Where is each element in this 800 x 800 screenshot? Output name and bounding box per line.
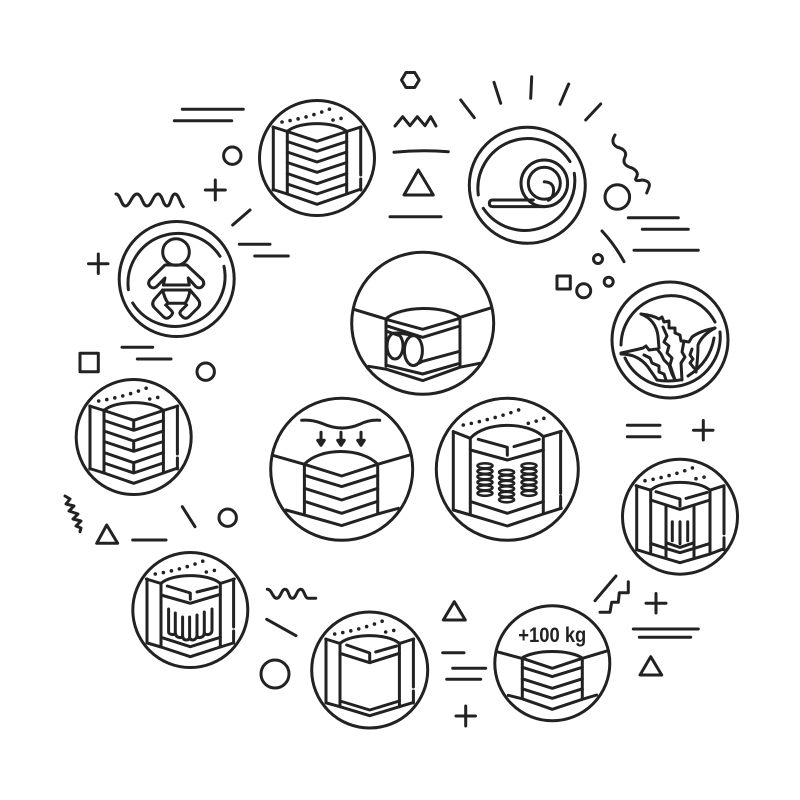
decorations: upper-right shapes [557, 135, 698, 298]
springs [478, 463, 536, 502]
icon: layered mattress, top [260, 100, 374, 216]
label: +100 kg: +100 kg [518, 624, 586, 647]
icon: 100 kg load mattress [495, 606, 610, 721]
decorations: sun rays above roll [461, 77, 601, 120]
decorations: lower-right shapes [595, 420, 713, 675]
decorations: top-left shapes [88, 109, 288, 274]
icon: mattress with zoned core, right [622, 459, 738, 574]
icon: mattress with springs [436, 398, 578, 540]
icon: mattress with cylinders, centre [352, 252, 494, 394]
icon: mattress with pressure arrows [271, 398, 413, 540]
icon: layered mattress with ticks, left [76, 380, 191, 494]
decorations: left shapes [65, 347, 236, 543]
decorations: bottom shapes [261, 589, 486, 726]
decorations: top-centre shapes [390, 72, 448, 217]
icon: aloe plant [612, 282, 728, 398]
icon: mattress with comb core, bottom-left [133, 552, 248, 668]
icon: rolled mattress [469, 127, 585, 243]
icon: baby in diaper [119, 222, 234, 336]
aloe leaves [621, 314, 715, 381]
icon: plain foam mattress, bottom [312, 612, 428, 728]
arrows [318, 432, 364, 445]
